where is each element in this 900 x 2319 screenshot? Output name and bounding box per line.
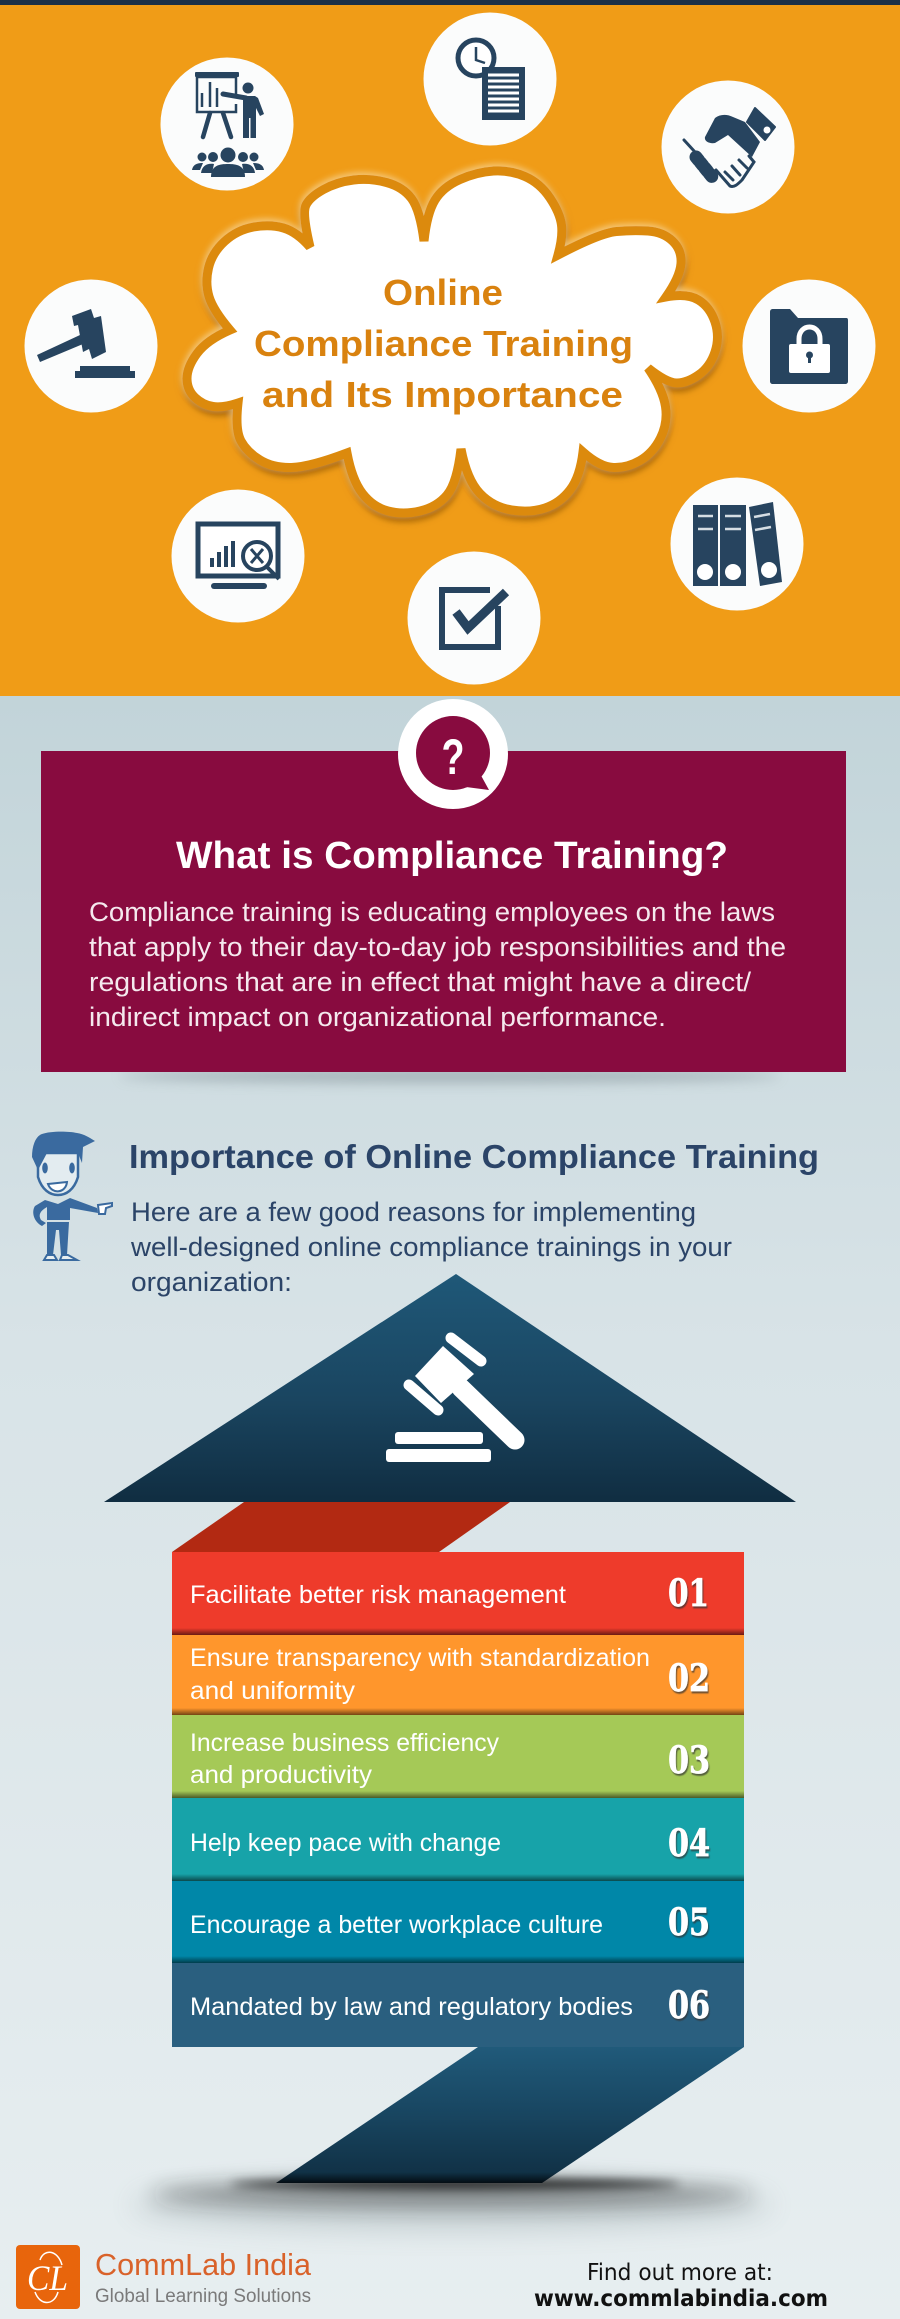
- icon: gavel: [24, 280, 158, 412]
- bar 02: [172, 1635, 744, 1715]
- logo mark: [16, 2245, 80, 2309]
- footer link: [534, 2260, 828, 2312]
- icon: locked folder: [742, 280, 876, 412]
- bar 06: [172, 1963, 744, 2047]
- ribbon tail: [276, 2047, 744, 2183]
- bar 04: [172, 1798, 744, 1881]
- bar 01: Facilitate better risk management: [190, 1581, 566, 1609]
- icon: presenter and audience: [160, 58, 294, 190]
- icon: white gavel: [386, 1338, 515, 1462]
- bar 02: and uniformity: [190, 1677, 356, 1705]
- bar 06: Mandated by law and regulatory bodies: [190, 1993, 633, 2021]
- bar 01: [172, 1552, 744, 1635]
- icon: chart with magnifier: [172, 490, 304, 622]
- intro text: organization:: [131, 1267, 292, 1297]
- body text: regulations that are in effect that might have a direct/: [89, 967, 752, 997]
- intro text: Here are a few good reasons for implementing: [131, 1197, 696, 1227]
- icon: binders: [670, 478, 804, 610]
- body text: that apply to their day-to-day job responsibilities and the: [89, 932, 786, 962]
- ground shadow: [132, 2179, 772, 2229]
- section heading: Importance of Online Compliance Training: [129, 1138, 819, 1175]
- bar 03: 03: [668, 1738, 710, 1782]
- bar 01: 01: [668, 1571, 709, 1615]
- bar 05: [172, 1881, 744, 1963]
- bar 06: 06: [668, 1983, 710, 2027]
- bar 04: Help keep pace with change: [190, 1829, 501, 1857]
- central cloud: [187, 171, 718, 513]
- footer link: www.commlabindia.com: [534, 2286, 828, 2312]
- mascot: man pointing: [32, 1132, 112, 1260]
- bar 05: 05: [668, 1900, 710, 1944]
- bar 02: 02: [668, 1656, 710, 1700]
- body text: [89, 897, 786, 1032]
- icon: question speech bubble: ?: [442, 729, 464, 785]
- icon: question speech bubble: [398, 699, 508, 809]
- bar 03: [172, 1715, 744, 1798]
- title: Compliance Training: [254, 323, 633, 364]
- icon: clock and document: [424, 12, 556, 146]
- logo mark: CL: [27, 2258, 68, 2298]
- page background: [0, 696, 900, 2319]
- bar 02: Ensure transparency with standardization: [190, 1644, 650, 1672]
- header banner: [0, 0, 900, 696]
- bar 03: Increase business efficiency: [190, 1729, 499, 1757]
- icon: handshake: [662, 80, 794, 214]
- title: [254, 272, 633, 415]
- footer link: Find out more at:: [587, 2260, 773, 2286]
- intro text: [130, 1197, 732, 1297]
- red ribbon fold: [172, 1502, 510, 1552]
- company name: CommLab India: [95, 2247, 312, 2282]
- intro text: well-designed online compliance trainings in your: [130, 1232, 732, 1262]
- panel: what is compliance training: [41, 699, 846, 1083]
- footer logo: [16, 2245, 312, 2309]
- body text: indirect impact on organizational performance.: [89, 1002, 666, 1032]
- bar 03: and productivity: [190, 1761, 373, 1789]
- arrow diagram: [104, 1274, 796, 2229]
- title: and Its Importance: [262, 374, 623, 415]
- arrow head: [104, 1274, 796, 1502]
- bar 05: Encourage a better workplace culture: [190, 1911, 603, 1939]
- bar 04: 04: [668, 1821, 710, 1865]
- icon: checkbox: [408, 552, 540, 684]
- body text: Compliance training is educating employees on the laws: [89, 897, 775, 927]
- heading: What is Compliance Training?: [176, 835, 728, 877]
- title: Online: [383, 272, 503, 313]
- tagline: Global Learning Solutions: [95, 2286, 311, 2307]
